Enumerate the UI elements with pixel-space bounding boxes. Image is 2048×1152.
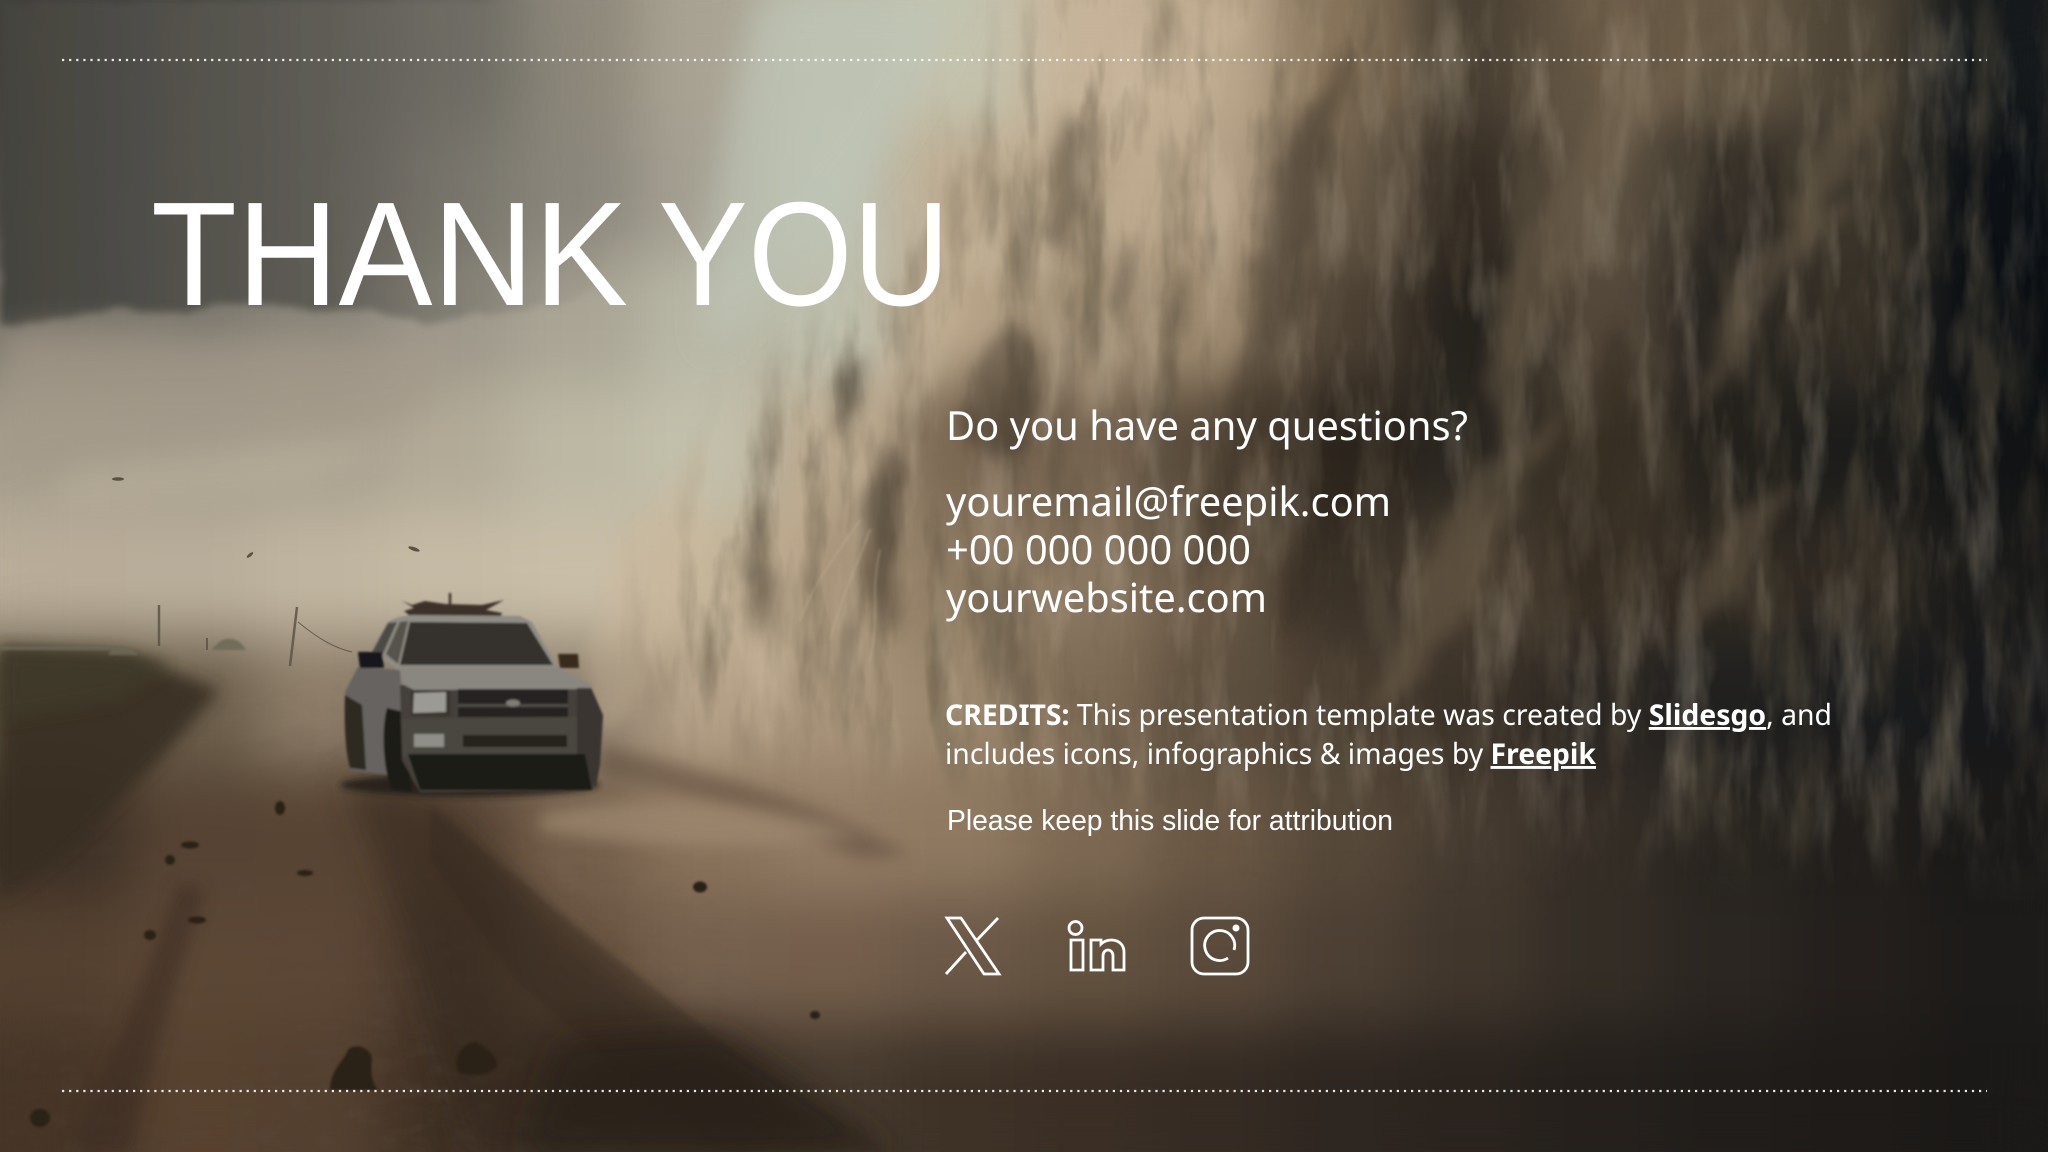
question heading: Do you have any questions? bbox=[946, 397, 1468, 452]
title: YOU bbox=[658, 172, 950, 337]
streaky dust texture bbox=[620, 0, 2048, 900]
row 0 bbox=[0, 0, 2048, 128]
row 8 bbox=[0, 1024, 2048, 1152]
dark shadow folds bbox=[744, 40, 1639, 650]
soft shadow band behind the truck bbox=[344, 775, 860, 1152]
lit sand billows bbox=[588, 0, 1250, 750]
bottom dotted rule bbox=[62, 1090, 1987, 1092]
title bbox=[151, 172, 950, 337]
thin pale veins in the dark fold bbox=[800, 520, 880, 660]
icon: LinkedIn bbox=[1069, 922, 1124, 970]
contact details: +00 000 000 000 bbox=[946, 521, 1251, 576]
rear wheel bbox=[345, 695, 366, 770]
grille bbox=[458, 689, 568, 717]
windblown debris bbox=[112, 477, 420, 559]
ground bbox=[0, 648, 910, 1152]
row 7 bbox=[0, 896, 2048, 1024]
light band beneath cloud bank bbox=[60, 444, 380, 505]
right fender bbox=[577, 688, 603, 786]
dust puff on road bbox=[540, 801, 860, 846]
lower cloud bank bbox=[0, 330, 460, 470]
front panel bbox=[400, 685, 603, 792]
road edge shadow beyond truck bbox=[600, 745, 910, 860]
contact details: youremail@freepik.com bbox=[946, 473, 1391, 528]
credits text: includes icons, infographics & images by Freepik bbox=[945, 734, 1596, 773]
contact details: yourwebsite.com bbox=[946, 569, 1267, 624]
attribution note: Please keep this slide for attribution bbox=[947, 805, 1393, 837]
underbody bbox=[408, 754, 592, 790]
hood bbox=[400, 667, 592, 690]
bumper bbox=[401, 717, 582, 756]
grassy embankment bbox=[0, 648, 220, 900]
title: THANK bbox=[151, 172, 628, 337]
top dotted rule bbox=[62, 59, 1987, 61]
roof rack bbox=[402, 600, 504, 616]
clods of dirt bbox=[30, 801, 820, 1127]
ground grain bbox=[0, 660, 800, 1152]
dust wall folds bbox=[588, 0, 2048, 900]
pale sky gap near the wall bbox=[707, 0, 960, 350]
sharper right edge of shadow band bbox=[430, 805, 890, 1152]
cab bbox=[372, 615, 558, 672]
sunlit ridges on the dark right side bbox=[1370, 20, 1900, 720]
social icons bbox=[946, 918, 1248, 974]
licence plate bbox=[414, 734, 444, 747]
row 5 bbox=[0, 640, 2048, 768]
row 2 bbox=[0, 256, 2048, 384]
side windows bbox=[372, 622, 397, 656]
row 6 bbox=[0, 768, 2048, 896]
dark patch bottom centre bbox=[520, 1030, 900, 1152]
left tyre rut bbox=[70, 880, 205, 1152]
side body bbox=[345, 667, 402, 775]
shadow under truck bbox=[340, 773, 600, 797]
icon: Instagram bbox=[1192, 918, 1248, 974]
lower grille bbox=[463, 735, 567, 747]
distant poles and wires bbox=[159, 605, 352, 666]
row 1 bbox=[0, 128, 2048, 256]
contact details bbox=[946, 473, 1391, 624]
headlight bbox=[411, 690, 450, 716]
credits text: CREDITS: This presentation template was created by Slidesgo, and bbox=[945, 695, 1832, 734]
icon: X bbox=[946, 918, 999, 974]
mirrors bbox=[358, 652, 384, 668]
distant trees and car bbox=[0, 639, 246, 655]
row 3 bbox=[0, 384, 2048, 512]
front wheel bbox=[384, 708, 412, 792]
credits text bbox=[945, 695, 1832, 773]
grille badge bbox=[506, 700, 520, 706]
row 4 bbox=[0, 512, 2048, 640]
pickup truck bbox=[340, 593, 603, 797]
storm cloud underside bbox=[0, 0, 640, 324]
windshield bbox=[400, 622, 553, 665]
